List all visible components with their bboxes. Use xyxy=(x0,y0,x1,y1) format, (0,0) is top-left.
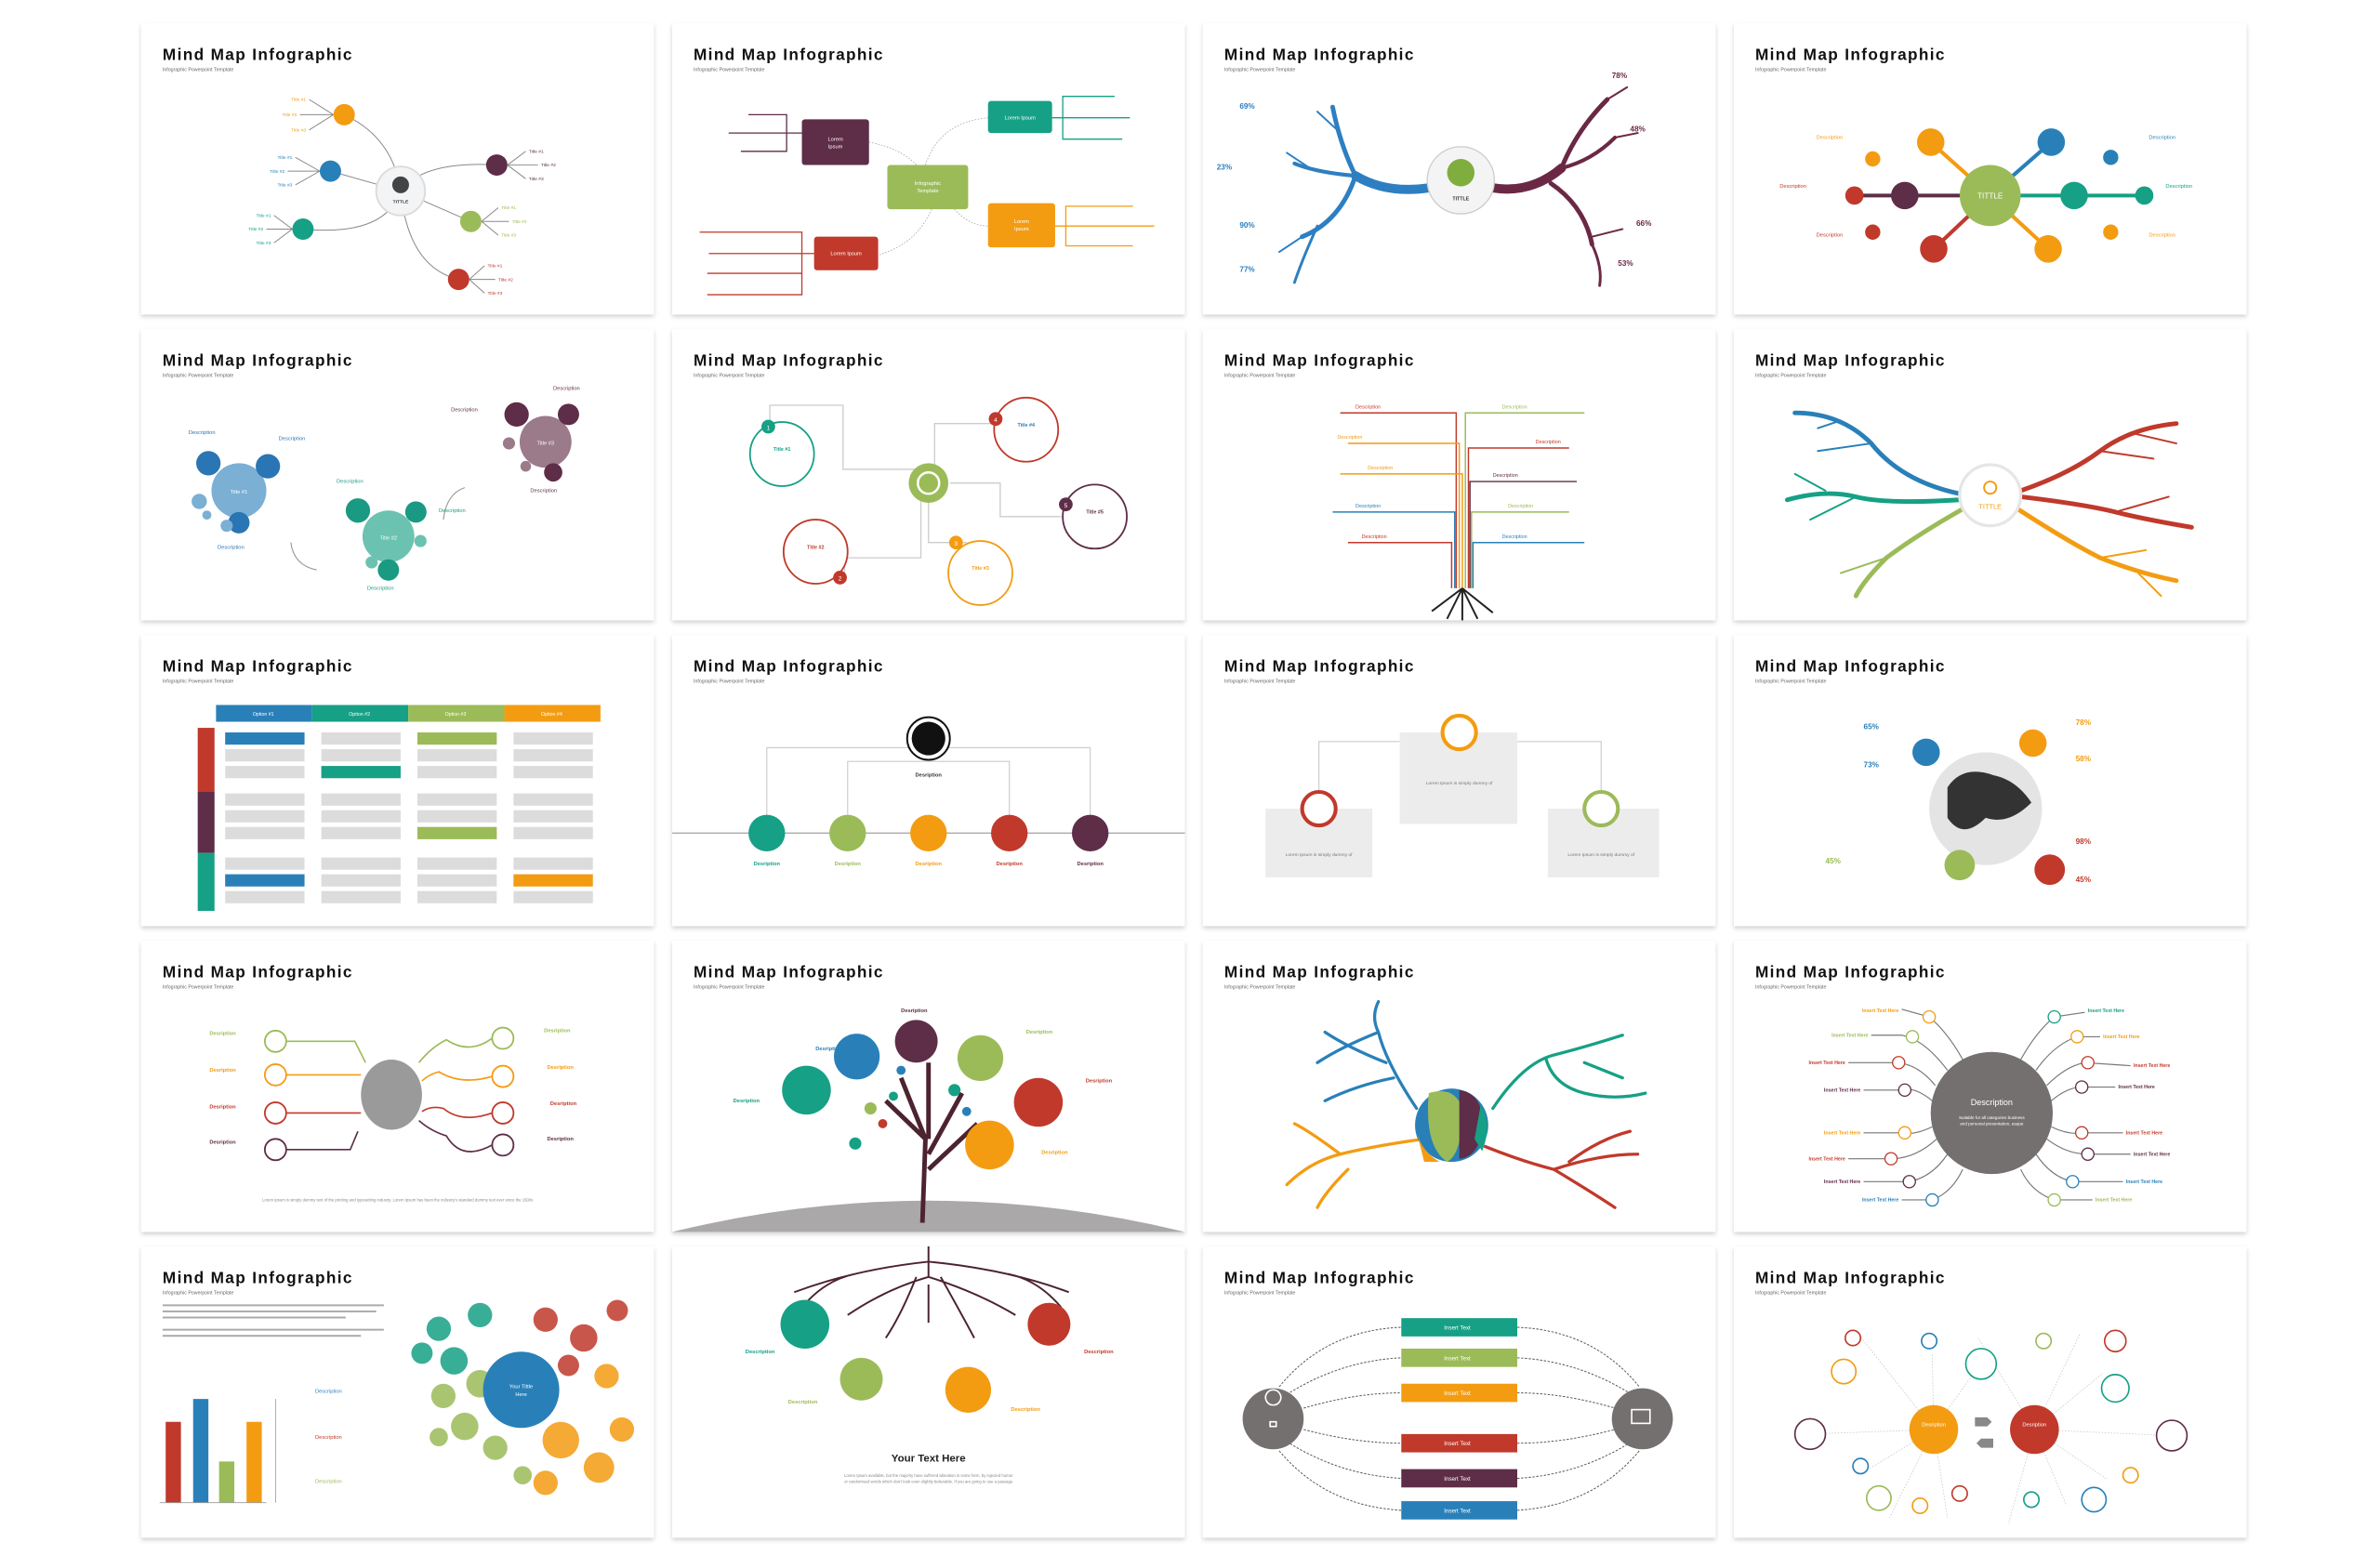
slide 9: option table: Option #3 xyxy=(445,712,466,718)
slide 19: dashed connections with buttons: Insert Text xyxy=(1444,1390,1471,1397)
slide 7: root tree lines: Description xyxy=(1493,473,1518,479)
slide 16: description hub: Insert Text Here xyxy=(2134,1152,2170,1157)
slide 3: branching percentages: TITTLE xyxy=(1452,196,1470,202)
slide 3: branching percentages: 90% xyxy=(1239,221,1255,230)
slide 4: circle hub: Mind Map Infographic xyxy=(1755,45,1945,63)
slide 14: tree of circles: Desription xyxy=(734,1099,760,1104)
slide 13: brain with lines: Desription xyxy=(209,1105,236,1111)
slide 14: tree of circles: Desription xyxy=(1026,1030,1053,1035)
slide 3: branching percentages: 23% xyxy=(1217,163,1233,171)
slide 1: radial mind map: Title #2 xyxy=(248,227,263,232)
slide 19: dashed connections with buttons xyxy=(1203,1246,1715,1537)
slide 17: bars and bubble cluster: Description xyxy=(315,1479,342,1484)
slide 11: three boxes: Lorem Ipsum is simply dummy of xyxy=(1426,781,1493,786)
slide 4: circle hub: Infographic Powerpoint Template xyxy=(1755,68,1826,73)
slide 3: branching percentages: 53% xyxy=(1618,259,1633,268)
slide 7: root tree lines: Infographic Powerpoint Template xyxy=(1224,374,1295,379)
slide 19: dashed connections with buttons: Infographic Powerpoint Template xyxy=(1224,1291,1295,1297)
slide 5: bubble clusters: Description xyxy=(451,408,478,414)
slide 12: world globe pins: Mind Map Infographic xyxy=(1755,656,1945,675)
slide 17: bars and bubble cluster: Description xyxy=(315,1435,342,1441)
slide 13: brain with lines: Desription xyxy=(544,1028,571,1034)
slide 1: radial mind map: Title #2 xyxy=(282,112,298,118)
slide 16: description hub: Insert Text Here xyxy=(1862,1008,1898,1014)
slide 5: bubble clusters: Mind Map Infographic xyxy=(163,350,352,369)
slide 13: brain with lines xyxy=(141,941,654,1232)
slide 2: box mind map: Mind Map Infographic xyxy=(694,45,883,63)
slide 16: description hub: and personal presentation, eaque xyxy=(1960,1122,2024,1127)
slide 14: tree of circles: Desription xyxy=(1086,1079,1113,1085)
slide 5: bubble clusters: Description xyxy=(367,586,394,592)
slide 1: radial mind map: Title #1 xyxy=(487,264,503,270)
slide 16: description hub: Insert Text Here xyxy=(2119,1085,2155,1090)
slide 1: radial mind map: Title #3 xyxy=(487,291,503,297)
slide 10: globe and five circles: Desription xyxy=(916,862,942,867)
slide 20: twin descriptions with outline circles: Desription xyxy=(1922,1423,1946,1429)
slide 19: dashed connections with buttons: Insert Text xyxy=(1444,1324,1471,1331)
slide 7: root tree lines: Description xyxy=(1355,404,1381,410)
slide 2: box mind map: Ipsum xyxy=(1014,227,1029,232)
slide 19: dashed connections with buttons: Insert Text xyxy=(1444,1355,1471,1362)
slide 12: world globe pins: 58% xyxy=(2076,755,2092,763)
slide 20: twin descriptions with outline circles: Desription xyxy=(2022,1423,2046,1429)
slide 2: box mind map: Infographic Powerpoint Template xyxy=(694,68,764,73)
slide 5: bubble clusters: Infographic Powerpoint Template xyxy=(163,374,233,379)
slide 15: colored brain branches xyxy=(1203,941,1715,1232)
slide 1: radial mind map: Title #3 xyxy=(277,183,293,189)
slide 3: branching percentages: Mind Map Infographic xyxy=(1224,45,1414,63)
slide 12: world globe pins: 45% xyxy=(1825,857,1842,865)
slide 7: root tree lines: Description xyxy=(1502,404,1527,410)
slide 6: numbered circles: 1 xyxy=(767,425,771,431)
slide 12: world globe pins: 98% xyxy=(2076,837,2092,846)
slide 16: description hub: Insert Text Here xyxy=(2126,1130,2162,1136)
slide 17: bars and bubble cluster: Mind Map Infographic xyxy=(163,1268,352,1286)
slide 10: globe and five circles: Infographic Powerpoint Template xyxy=(694,679,764,685)
slide 7: root tree lines: Description xyxy=(1368,466,1393,471)
slide 16: description hub: Insert Text Here xyxy=(1862,1198,1898,1204)
slide 9: option table xyxy=(141,635,654,926)
slide 14: tree of circles: Infographic Powerpoint Template xyxy=(694,985,764,991)
slide 19: dashed connections with buttons: Insert Text xyxy=(1444,1508,1471,1514)
slide 16: description hub xyxy=(1734,941,2246,1232)
slide 5: bubble clusters: Title #3 xyxy=(537,441,554,447)
slide 14: tree of circles: Mind Map Infographic xyxy=(694,962,883,981)
slide 18: roots and circles: or randomised words which don't look even slightly believable. If you are going to use a passage xyxy=(844,1479,1013,1483)
slide 18: roots and circles: Description xyxy=(788,1400,818,1405)
slide 10: globe and five circles: Mind Map Infographic xyxy=(694,656,883,675)
slide 5: bubble clusters: Description xyxy=(189,430,216,436)
slide 2: box mind map: Infographic xyxy=(915,181,941,187)
slide 16: description hub: Insert Text Here xyxy=(2126,1179,2162,1185)
slide 13: brain with lines: Lorem Ipsum is simply dummy text of the printing and typesetting industry. Lorem Ipsum has been the industry's standard dummy text ever since the 1500s xyxy=(262,1198,533,1203)
slide 5: bubble clusters: Description xyxy=(218,545,245,550)
slide 4: circle hub: Description xyxy=(1817,233,1843,239)
slide 2: box mind map: Lorem Ipsum xyxy=(1004,115,1036,121)
slide 11: three boxes: Lorem Ipsum is simply dummy of xyxy=(1567,852,1635,858)
slide 5: bubble clusters: Description xyxy=(337,480,364,485)
slide 7: root tree lines: Mind Map Infographic xyxy=(1224,350,1414,369)
slide 16: description hub: Insert Text Here xyxy=(2096,1198,2132,1204)
slide 1: radial mind map: Title #3 xyxy=(501,233,516,239)
slide 7: root tree lines: Description xyxy=(1508,504,1533,509)
slide 2: box mind map: Lorem xyxy=(827,137,843,142)
slide 2: box mind map: Ipsum xyxy=(828,145,843,151)
slide 12: world globe pins: 45% xyxy=(2076,876,2092,884)
slide 12: world globe pins: Infographic Powerpoint Template xyxy=(1755,679,1826,685)
slide 18: roots and circles: Description xyxy=(1084,1350,1114,1355)
slide 5: bubble clusters xyxy=(141,329,654,620)
slide 13: brain with lines: Desription xyxy=(547,1065,574,1071)
slide 6: numbered circles: Title #5 xyxy=(1086,510,1104,516)
slide 4: circle hub xyxy=(1734,23,2246,314)
slide 4: circle hub: Description xyxy=(1779,184,1806,190)
slide 16: description hub: Insert Text Here xyxy=(1824,1130,1860,1136)
slide 16: description hub: Insert Text Here xyxy=(2103,1034,2140,1040)
slide 9: option table: Option #2 xyxy=(349,712,370,718)
slide 5: bubble clusters: Description xyxy=(439,508,466,514)
slide 14: tree of circles xyxy=(672,941,1184,1232)
slide 1: radial mind map: TITTLE xyxy=(393,200,409,205)
slide 13: brain with lines: Desription xyxy=(209,1032,236,1037)
slide 16: description hub: Insert Text Here xyxy=(1809,1156,1845,1162)
slide 18: roots and circles xyxy=(672,1246,1184,1537)
slide 13: brain with lines: Desription xyxy=(209,1140,236,1145)
slide 16: description hub: Description xyxy=(1971,1098,2013,1107)
slide 13: brain with lines: Desription xyxy=(209,1068,236,1074)
slide 6: numbered circles: 5 xyxy=(1064,503,1068,509)
slide 16: description hub: Insert Text Here xyxy=(2134,1063,2170,1069)
slide 5: bubble clusters: Description xyxy=(530,489,557,494)
slide 3: branching percentages: 66% xyxy=(1636,219,1652,228)
slide 9: option table: Option #4 xyxy=(541,712,562,718)
slide 12: world globe pins: 73% xyxy=(1864,761,1880,770)
slide 13: brain with lines: Desription xyxy=(547,1137,574,1142)
slide 6: numbered circles: 3 xyxy=(954,541,958,547)
slide 17: bars and bubble cluster: Your Tittle xyxy=(509,1385,533,1390)
slide 1: radial mind map: Title #3 xyxy=(257,241,271,246)
slide 8: organic branches with bulb xyxy=(1734,329,2246,620)
slide 9: option table: Infographic Powerpoint Template xyxy=(163,679,233,685)
slide 7: root tree lines xyxy=(1203,329,1715,620)
slide 19: dashed connections with buttons: Mind Map Infographic xyxy=(1224,1268,1414,1286)
slide 5: bubble clusters: Description xyxy=(553,387,580,392)
slide 14: tree of circles: Desription xyxy=(901,1008,928,1014)
slide 1: radial mind map: Title #1 xyxy=(529,149,544,154)
slide 5: bubble clusters: Title #1 xyxy=(231,490,247,495)
slide 11: three boxes: Infographic Powerpoint Template xyxy=(1224,679,1295,685)
slide 5: bubble clusters: Title #2 xyxy=(380,535,397,541)
slide 1: radial mind map: Title #1 xyxy=(291,98,306,103)
slide 15: colored brain branches: Infographic Powerpoint Template xyxy=(1224,985,1295,991)
slide 16: description hub: Insert Text Here xyxy=(1824,1179,1860,1185)
slide 16: description hub: Insert Text Here xyxy=(1824,1087,1860,1093)
slide 2: box mind map: Lorem Ipsum xyxy=(830,251,862,257)
slide 10: globe and five circles: Desription xyxy=(1077,862,1104,867)
slide 18: roots and circles: Description xyxy=(746,1350,775,1355)
slide 1: radial mind map: Title #1 xyxy=(501,205,516,211)
slide 4: circle hub: Description xyxy=(2165,184,2192,190)
slide 20: twin descriptions with outline circles xyxy=(1734,1246,2246,1537)
slide 7: root tree lines: Description xyxy=(1337,435,1362,441)
slide 1: radial mind map: Title #3 xyxy=(529,177,544,182)
slide 6: numbered circles: Title #2 xyxy=(807,545,825,550)
slide 2: box mind map: Lorem xyxy=(1014,219,1029,225)
slide 11: three boxes: Lorem Ipsum is simply dummy of xyxy=(1286,852,1353,858)
slide 6: numbered circles: 2 xyxy=(839,576,842,583)
slide 3: branching percentages xyxy=(1203,23,1715,314)
slide 3: branching percentages: Infographic Powerpoint Template xyxy=(1224,68,1295,73)
slide 20: twin descriptions with outline circles: Infographic Powerpoint Template xyxy=(1755,1291,1826,1297)
slide 17: bars and bubble cluster: Description xyxy=(315,1390,342,1395)
slide 15: colored brain branches: Mind Map Infographic xyxy=(1224,962,1414,981)
slide 12: world globe pins: 78% xyxy=(2076,718,2092,727)
slide 4: circle hub: TITTLE xyxy=(1977,192,2003,201)
slide 17: bars and bubble cluster: Here xyxy=(515,1392,527,1398)
slide 4: circle hub: Description xyxy=(1817,136,1843,141)
slide 16: description hub: Insert Text Here xyxy=(1831,1033,1869,1038)
slide 18: roots and circles: Your Text Here xyxy=(892,1453,966,1464)
slide 8: organic branches with bulb: Mind Map Infographic xyxy=(1755,350,1945,369)
slide 16: description hub: Suitable for all categories business xyxy=(1959,1115,2025,1120)
slide 18: roots and circles: Description xyxy=(1011,1407,1040,1413)
slide 6: numbered circles: Title #3 xyxy=(972,566,989,572)
slide 14: tree of circles: Desription xyxy=(815,1047,842,1052)
slide 10: globe and five circles: Desription xyxy=(916,773,942,779)
slide 3: branching percentages: 78% xyxy=(1612,72,1628,80)
slide 13: brain with lines: Desription xyxy=(550,1101,577,1107)
slide 10: globe and five circles: Desription xyxy=(997,862,1023,867)
slide 19: dashed connections with buttons: Insert Text xyxy=(1444,1441,1471,1447)
slide 2: box mind map: Template xyxy=(917,189,939,194)
slide 4: circle hub: Description xyxy=(2149,136,2175,141)
slide 6: numbered circles: 4 xyxy=(994,417,998,424)
slide 1: radial mind map: Title #2 xyxy=(270,169,284,175)
slide 12: world globe pins: 65% xyxy=(1864,723,1880,731)
slide 7: root tree lines: Description xyxy=(1502,534,1527,540)
slide 1: radial mind map: Title #2 xyxy=(541,163,556,168)
slide 10: globe and five circles: Desription xyxy=(835,862,861,867)
slide 9: option table: Mind Map Infographic xyxy=(163,656,352,675)
slide 1: radial mind map xyxy=(141,23,654,314)
slide 17: bars and bubble cluster xyxy=(141,1246,654,1537)
slide 18: roots and circles: Lorem Ipsum available, but the majority have suffered alteration in some form, by injected humor xyxy=(844,1473,1013,1478)
slide 7: root tree lines: Description xyxy=(1362,534,1387,540)
slide 6: numbered circles: Infographic Powerpoint Template xyxy=(694,374,764,379)
slide 1: radial mind map: Infographic Powerpoint Template xyxy=(163,68,233,73)
slide 16: description hub: Mind Map Infographic xyxy=(1755,962,1945,981)
slide 3: branching percentages: 77% xyxy=(1239,265,1255,273)
slide 8: organic branches with bulb: TITTLE xyxy=(1978,503,2002,511)
slide 1: radial mind map: Title #1 xyxy=(257,213,271,218)
slide 9: option table: Option #1 xyxy=(253,712,274,718)
slide 11: three boxes: Mind Map Infographic xyxy=(1224,656,1414,675)
slide 6: numbered circles: Title #4 xyxy=(1017,423,1035,428)
slide 16: description hub: Infographic Powerpoint Template xyxy=(1755,985,1826,991)
slide 20: twin descriptions with outline circles: Mind Map Infographic xyxy=(1755,1268,1945,1286)
slide 6: numbered circles: Mind Map Infographic xyxy=(694,350,883,369)
slide 7: root tree lines: Description xyxy=(1536,440,1561,445)
slide 1: radial mind map: Title #2 xyxy=(512,219,527,225)
slide 13: brain with lines: Infographic Powerpoint Template xyxy=(163,985,233,991)
slide 17: bars and bubble cluster: Infographic Powerpoint Template xyxy=(163,1291,233,1297)
slide 1: radial mind map: Title #1 xyxy=(277,155,293,161)
slide 14: tree of circles: Desription xyxy=(1041,1151,1068,1156)
slide 19: dashed connections with buttons: Insert Text xyxy=(1444,1476,1471,1483)
slide 3: branching percentages: 69% xyxy=(1239,102,1255,111)
slide 16: description hub: Insert Text Here xyxy=(2088,1008,2124,1014)
slide 11: three boxes xyxy=(1203,635,1715,926)
slide 6: numbered circles xyxy=(672,329,1184,620)
slide 2: box mind map xyxy=(672,23,1184,314)
slide 10: globe and five circles xyxy=(672,635,1184,926)
slide 7: root tree lines: Description xyxy=(1355,504,1381,509)
slide 3: branching percentages: 48% xyxy=(1630,125,1646,133)
slide 4: circle hub: Description xyxy=(2149,233,2175,239)
slide 1: radial mind map: Title #2 xyxy=(498,277,513,283)
slide 12: world globe pins xyxy=(1734,635,2246,926)
slide 6: numbered circles: Title #1 xyxy=(774,447,790,453)
slide 1: radial mind map: Title #3 xyxy=(291,127,306,133)
slide 10: globe and five circles: Desription xyxy=(754,862,780,867)
slide 8: organic branches with bulb: Infographic Powerpoint Template xyxy=(1755,374,1826,379)
slide 5: bubble clusters: Description xyxy=(279,437,305,442)
slide 13: brain with lines: Mind Map Infographic xyxy=(163,962,352,981)
slide 1: radial mind map: Mind Map Infographic xyxy=(163,45,352,63)
slide 16: description hub: Insert Text Here xyxy=(1809,1061,1845,1066)
